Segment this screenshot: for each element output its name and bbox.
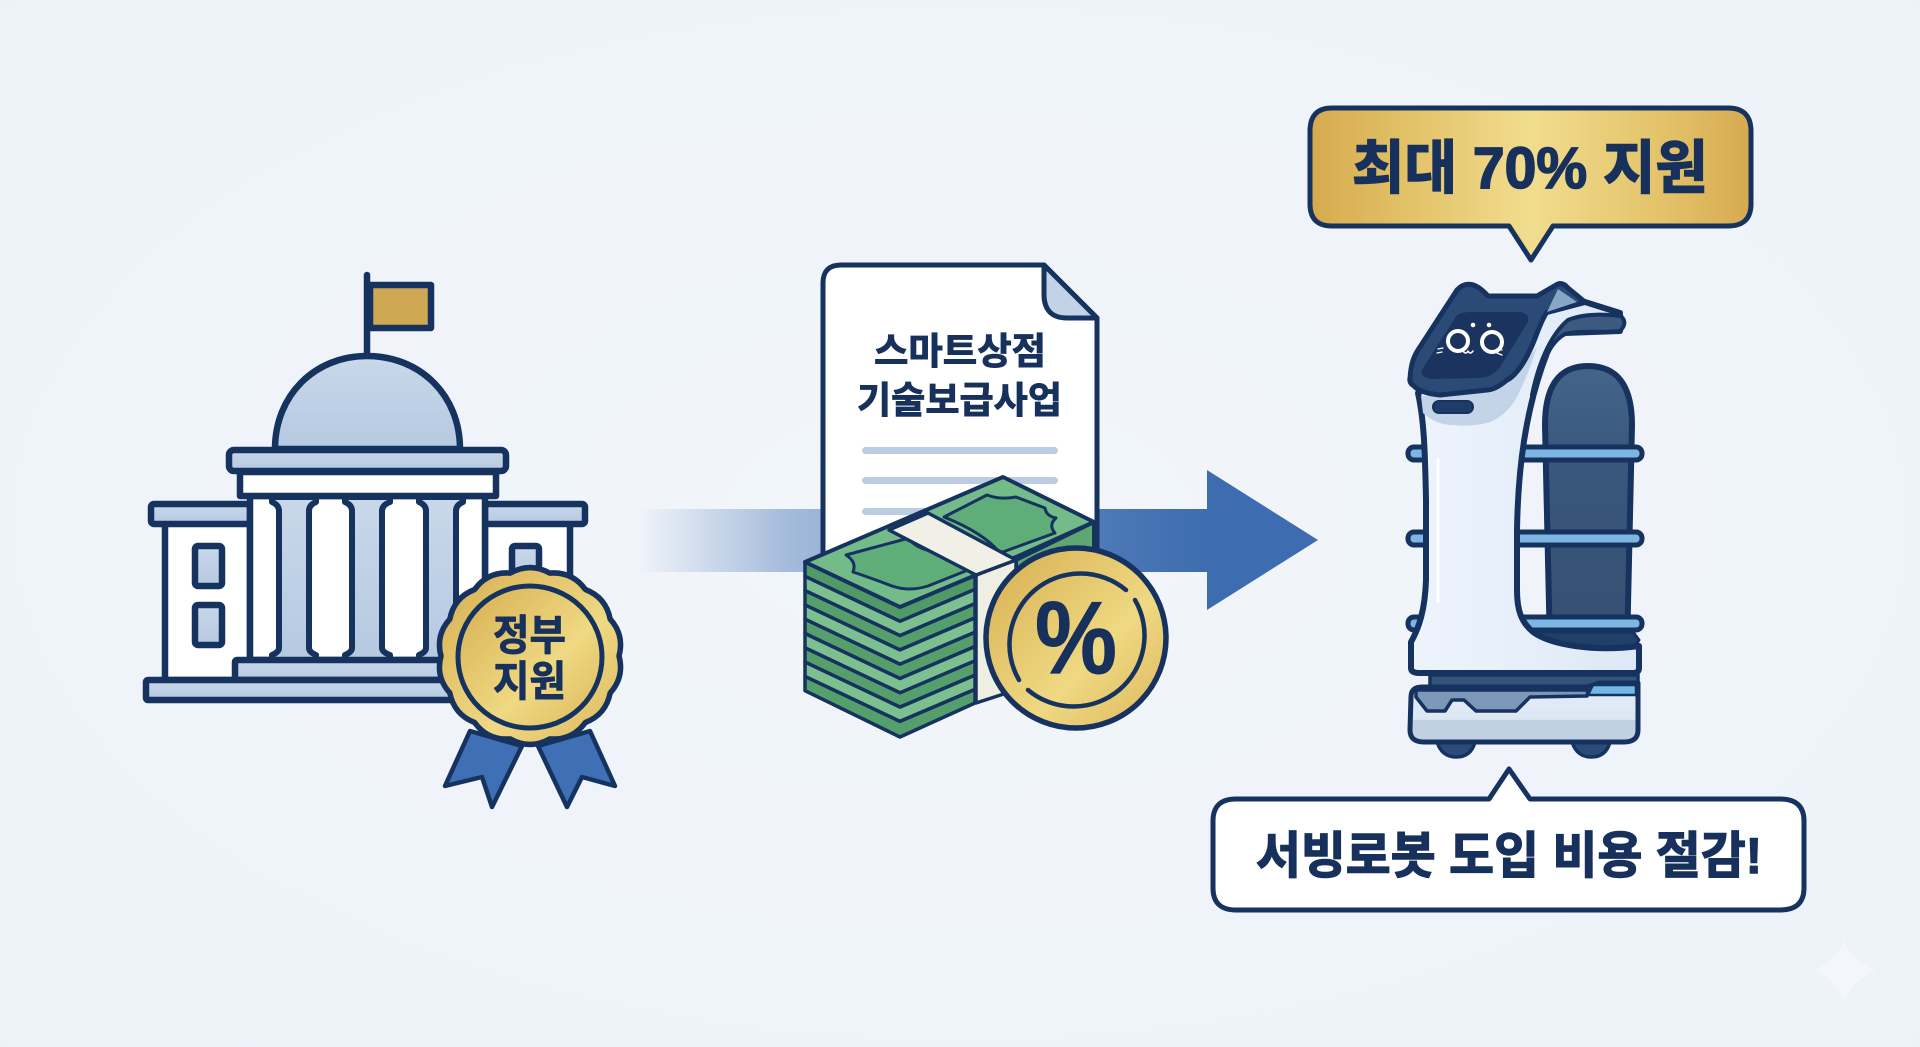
stacked bills xyxy=(805,562,975,737)
cream band side xyxy=(976,560,1016,703)
left wing xyxy=(151,504,250,680)
sensor slot xyxy=(1433,401,1473,413)
callout text: 최대 70% 지원 xyxy=(1352,136,1708,201)
base xyxy=(146,680,486,700)
neck lip xyxy=(1532,315,1624,395)
badge text: 정부 xyxy=(493,612,566,659)
document title: 기술보급사업 xyxy=(857,380,1062,421)
robot screen xyxy=(1422,312,1528,379)
robot base xyxy=(1410,675,1638,742)
wheels xyxy=(1437,742,1610,757)
document text lines xyxy=(862,447,1058,515)
robot body xyxy=(1411,302,1639,673)
ribbon tails xyxy=(445,731,615,807)
icon: percent coin xyxy=(986,548,1166,728)
badge text xyxy=(493,612,566,705)
badge text: 지원 xyxy=(493,658,566,705)
callout text: 서빙로봇 도입 비용 절감! xyxy=(1256,828,1762,884)
icon: program document xyxy=(823,265,1097,578)
body shading under head xyxy=(1421,347,1537,426)
paper band xyxy=(889,513,1016,575)
page fold xyxy=(1044,265,1097,318)
coin inner ring xyxy=(1009,573,1145,707)
ear light panel xyxy=(1547,289,1577,312)
icon: serving robot xyxy=(1408,284,1642,757)
callout: up to 70% support xyxy=(1310,108,1751,260)
icon: government support ribbon badge xyxy=(439,568,621,807)
right wing xyxy=(485,504,585,680)
steps xyxy=(235,660,485,680)
dome xyxy=(275,356,460,449)
document title: 스마트상점 xyxy=(874,331,1046,372)
main portico xyxy=(250,496,485,660)
tray rods xyxy=(1408,447,1642,630)
bill prints xyxy=(846,495,1056,589)
rear tray column xyxy=(1545,366,1632,650)
dark tray foot xyxy=(1524,632,1639,650)
robot cat face xyxy=(1437,323,1502,355)
back edge of stack xyxy=(1016,522,1094,600)
cornice xyxy=(229,450,506,471)
seal xyxy=(439,568,621,744)
columns xyxy=(272,497,463,660)
icon: government building xyxy=(146,275,585,700)
arrow: flow from government to robot xyxy=(637,470,1318,610)
flag xyxy=(367,275,431,356)
document title xyxy=(857,331,1062,421)
watermark sparkle xyxy=(1814,940,1876,1003)
callout: serving robot cost savings xyxy=(1213,769,1804,910)
percent sign: % xyxy=(1035,580,1117,695)
frieze xyxy=(240,472,496,496)
icon: stack of banknotes xyxy=(805,477,1094,737)
ear highlight xyxy=(1547,288,1577,312)
top bill xyxy=(805,477,1094,607)
robot head xyxy=(1410,284,1585,395)
body highlight xyxy=(1436,458,1440,603)
